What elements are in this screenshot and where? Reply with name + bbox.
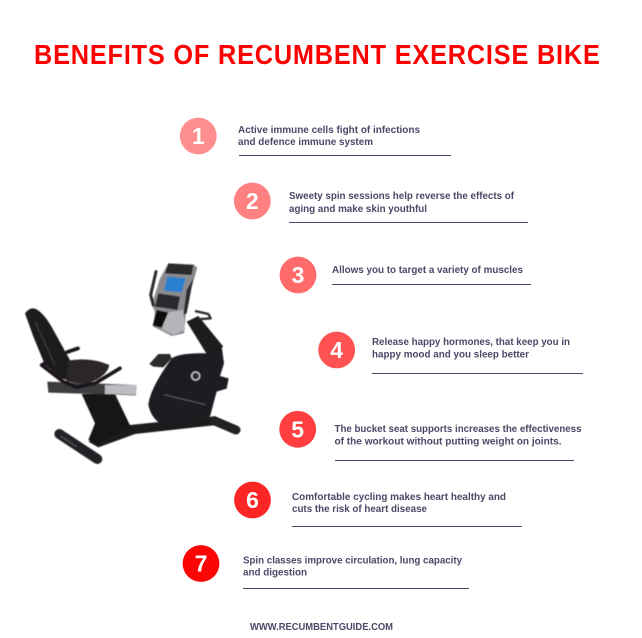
benefit 2 text: aging and make skin youthful — [289, 203, 427, 215]
bike backrest — [25, 308, 72, 382]
bike rear stabilizer — [214, 421, 236, 430]
bike base beam — [88, 417, 217, 447]
bike side handle — [195, 311, 211, 319]
icon: number 6 badge: 6 — [246, 487, 259, 513]
benefit 5 text: The bucket seat supports increases the effectiveness — [334, 423, 582, 435]
icon: number 3 badge — [280, 257, 316, 293]
title: BENEFITS OF RECUMBENT EXERCISE BIKE — [34, 39, 600, 70]
benefit 4 — [318, 332, 583, 374]
benefit 6 text: Comfortable cycling makes heart healthy and — [292, 491, 506, 503]
benefit 1 text: and defence immune system — [238, 136, 373, 148]
benefit 6 text: cuts the risk of heart disease — [292, 503, 427, 515]
icon: number 3 badge: 3 — [292, 262, 304, 288]
icon: number 5 badge: 5 — [291, 416, 304, 442]
benefit 4 text: Release happy hormones, that keep you in — [372, 336, 570, 348]
benefit 4 text: happy mood and you sleep better — [372, 348, 529, 360]
benefit 1 — [180, 118, 451, 156]
icon: number 2 badge: 2 — [246, 188, 259, 214]
bike seat column — [82, 394, 131, 444]
bike console neck — [187, 316, 223, 354]
icon: number 1 badge: 1 — [192, 123, 205, 149]
benefit 2 — [234, 183, 528, 222]
benefit 7 text: and digestion — [243, 566, 307, 578]
icon: number 4 badge — [318, 332, 355, 368]
benefit 7 text: Spin classes improve circulation, lung capacity — [243, 554, 462, 566]
bike flywheel housing — [148, 346, 229, 425]
bike seat cushion — [67, 359, 109, 384]
icon: number 7 badge: 7 — [195, 550, 207, 576]
benefit 3 — [280, 257, 531, 293]
bike seat handles — [42, 348, 120, 387]
icon: number 1 badge — [180, 118, 217, 154]
bike console — [152, 263, 197, 336]
icon: number 5 badge — [279, 411, 316, 448]
icon: number 6 badge — [234, 482, 271, 518]
benefit 2 text: Sweety spin sessions help reverse the effects of — [289, 190, 514, 202]
benefit 1 text: Active immune cells fight of infections — [238, 124, 420, 136]
footer website: WWW.RECUMBENTGUIDE.COM — [250, 621, 393, 633]
benefit 3 text: Allows you to target a variety of muscles — [332, 264, 523, 276]
icon: number 4 badge: 4 — [330, 337, 343, 363]
illustration: recumbent exercise bike — [25, 263, 236, 459]
bike front stabilizer — [59, 434, 97, 459]
benefit 7 — [183, 545, 469, 588]
bike console handle — [151, 272, 156, 305]
icon: number 7 badge — [183, 545, 219, 582]
benefit 6 — [234, 482, 522, 526]
icon: number 2 badge — [234, 183, 271, 219]
bike seat rail — [47, 382, 137, 395]
benefit 5 — [279, 411, 582, 460]
bike pedal — [149, 354, 172, 367]
benefit 5 text: of the workout without putting weight on joints. — [334, 436, 562, 448]
